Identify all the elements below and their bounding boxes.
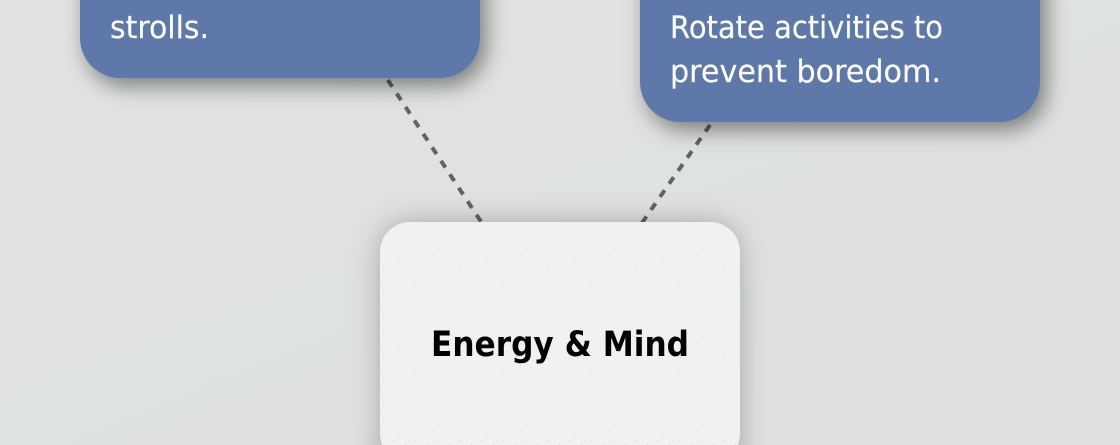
shadow: center card (380, 222, 740, 445)
connector: left card to center card (388, 80, 483, 224)
text: left card: strolls. (110, 10, 209, 46)
heading: Energy & Mind: Energy & Mind (431, 325, 689, 365)
connector: right card to center card (640, 125, 710, 225)
text: right card (670, 10, 943, 90)
text: right card: Rotate activities to (670, 10, 943, 46)
panel: center card Energy & Mind (380, 222, 740, 445)
panel: left blue card (80, 0, 480, 78)
panel: right blue card (640, 0, 1040, 122)
text: right card: prevent boredom. (670, 54, 941, 90)
